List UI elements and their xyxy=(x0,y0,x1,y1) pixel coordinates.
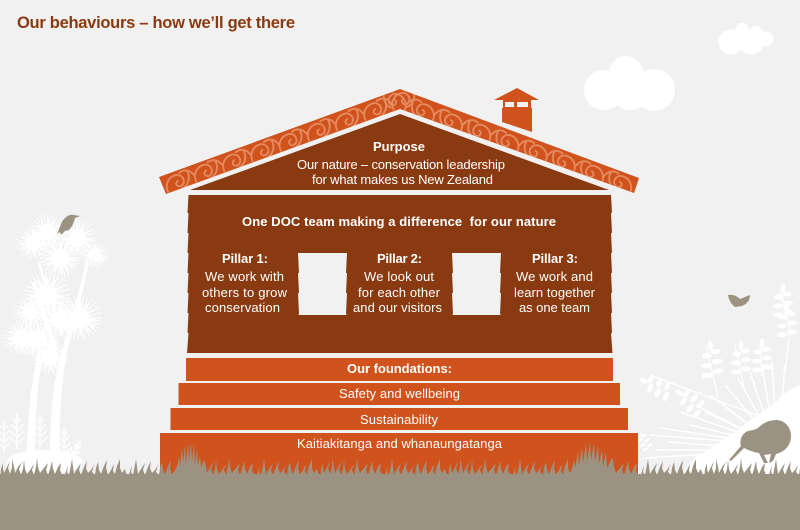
purpose text: Our nature – conservation leadership xyxy=(297,157,505,172)
right grass tuft xyxy=(570,442,616,476)
purpose text: for what makes us New Zealand xyxy=(312,172,493,187)
purpose text: Purpose xyxy=(373,139,425,154)
pillar 3: as one team xyxy=(519,300,590,315)
pillar 1 xyxy=(202,251,288,315)
purpose text xyxy=(297,139,505,187)
pillar 2: for each other xyxy=(358,285,441,300)
left grass tuft xyxy=(176,442,206,476)
foundation step: safety and wellbeing xyxy=(178,383,620,405)
pillar 1: others to grow xyxy=(202,285,288,300)
ground with grass xyxy=(0,442,800,530)
icon: small cloud xyxy=(718,23,774,54)
pillar 3: Pillar 3: xyxy=(532,251,578,266)
heading: one DOC team: One DOC team making a difference for our nature xyxy=(242,214,556,229)
chimney xyxy=(494,88,539,132)
icon: kiwi bird xyxy=(729,420,791,463)
icon: butterfly xyxy=(728,295,750,307)
foundation step: our foundations xyxy=(186,358,613,381)
pillar 2: Pillar 2: xyxy=(377,251,422,266)
foundation step: our foundations: Our foundations: xyxy=(347,361,452,376)
foundation step: safety and wellbeing: Safety and wellbeing xyxy=(339,386,460,401)
pillar 1: conservation xyxy=(205,300,280,315)
gable xyxy=(190,114,609,190)
title: Our behaviours – how we’ll get there xyxy=(17,14,295,32)
pillar 1: Pillar 1: xyxy=(222,251,268,266)
pillar 2 xyxy=(353,251,442,315)
house xyxy=(159,86,639,480)
pillar 1: We work with xyxy=(205,269,284,284)
house body with windows xyxy=(187,195,612,353)
pillar 2: We look out xyxy=(364,269,434,284)
pillar 3: learn together xyxy=(514,285,596,300)
pillar 3 xyxy=(514,251,596,315)
pillar 3: We work and xyxy=(516,269,593,284)
roof with koru pattern xyxy=(159,86,639,195)
foundation step: kaitiakitanga and whanaungatanga xyxy=(160,433,638,480)
icon: large cloud xyxy=(584,56,675,111)
pillar 2: and our visitors xyxy=(353,300,442,315)
illustration: cabbage tree xyxy=(0,214,109,474)
foundation step: kaitiakitanga and whanaungatanga: Kaitiakitanga and whanaungatanga xyxy=(297,436,503,451)
foundation step: sustainability: Sustainability xyxy=(360,412,438,427)
illustration: flax and shrubs xyxy=(633,284,800,476)
icon: tui bird xyxy=(57,215,80,235)
foundation step: sustainability xyxy=(170,408,628,430)
